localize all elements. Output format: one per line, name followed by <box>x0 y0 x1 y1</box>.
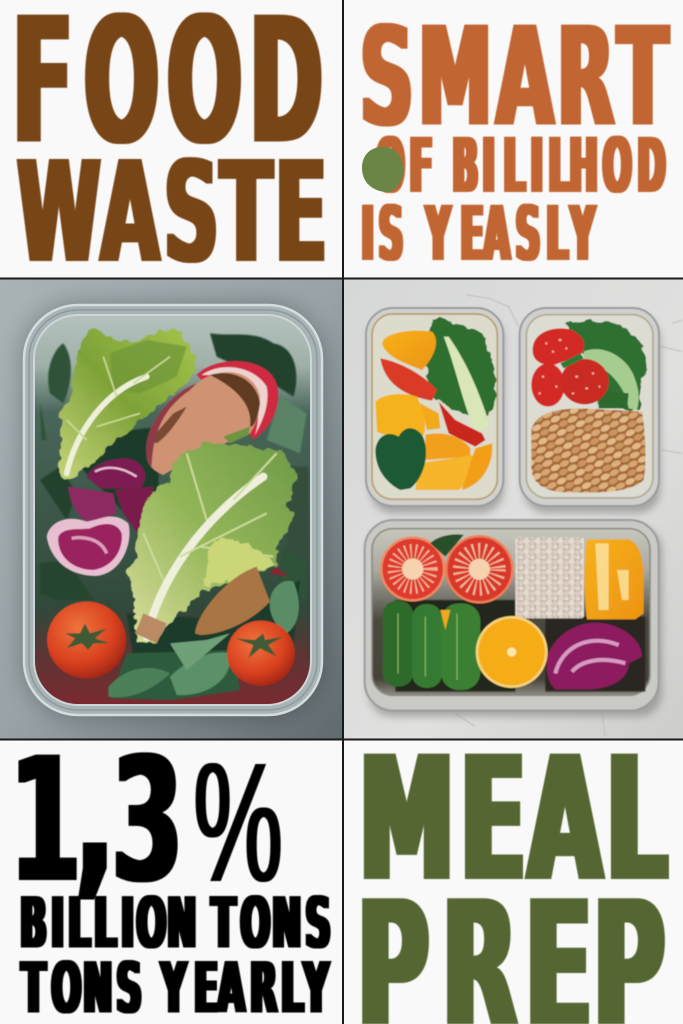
container shadows <box>369 317 662 717</box>
cucumbers <box>383 601 480 690</box>
heading: food waste: WASTE <box>17 132 327 295</box>
red cabbage <box>47 459 153 576</box>
photo: three meal prep containers <box>344 279 683 739</box>
tomato slices <box>380 534 513 603</box>
orange half <box>476 616 548 688</box>
heading: smart of bililhod is yeasly: OF BILILHOD <box>376 122 666 210</box>
side leaves <box>108 567 299 700</box>
bok choy stems <box>444 337 489 430</box>
stat: 1,3%: % <box>194 728 283 918</box>
greens <box>565 320 646 410</box>
label: billion tons, tons yearly <box>20 884 331 1024</box>
glass container <box>24 305 322 715</box>
container: bottom <box>365 520 659 711</box>
radish and meat slice <box>146 361 278 475</box>
container: top right <box>520 308 659 506</box>
icon: green blob <box>362 147 403 192</box>
spinach leaf <box>375 428 426 490</box>
photo: salad container <box>0 279 342 739</box>
strawberries <box>531 328 609 407</box>
container: top left <box>366 308 503 506</box>
dark leaves <box>40 333 308 657</box>
lettuce leaf center <box>127 442 297 643</box>
red cabbage <box>547 623 642 689</box>
rice cake <box>515 537 584 618</box>
bok choy leaf <box>425 319 495 420</box>
stat: 1,3%: 1,3 <box>10 717 183 921</box>
bread piece <box>195 567 270 635</box>
label: billion tons, tons yearly: BILLION TONS <box>20 884 331 965</box>
tomato left <box>47 601 126 679</box>
marble cracks <box>455 295 682 737</box>
heading: smart of bililhod is yeasly: SMART <box>360 0 668 157</box>
yellow block <box>584 539 644 619</box>
heading: meal prep <box>357 719 667 1024</box>
pepper red <box>380 358 437 401</box>
lettuce leaf left <box>59 328 195 480</box>
heading: smart of bililhod is yeasly: IS YEASLY <box>361 190 595 278</box>
heading: smart of bililhod is yeasly <box>360 0 668 278</box>
stat: 1,3% <box>10 717 283 921</box>
pepper orange <box>382 331 436 370</box>
tomato right <box>227 621 295 686</box>
heading: meal prep: MEAL <box>360 719 667 920</box>
heading: food waste <box>13 0 327 295</box>
grains <box>531 408 645 493</box>
pepper yellow chunks <box>375 394 425 437</box>
